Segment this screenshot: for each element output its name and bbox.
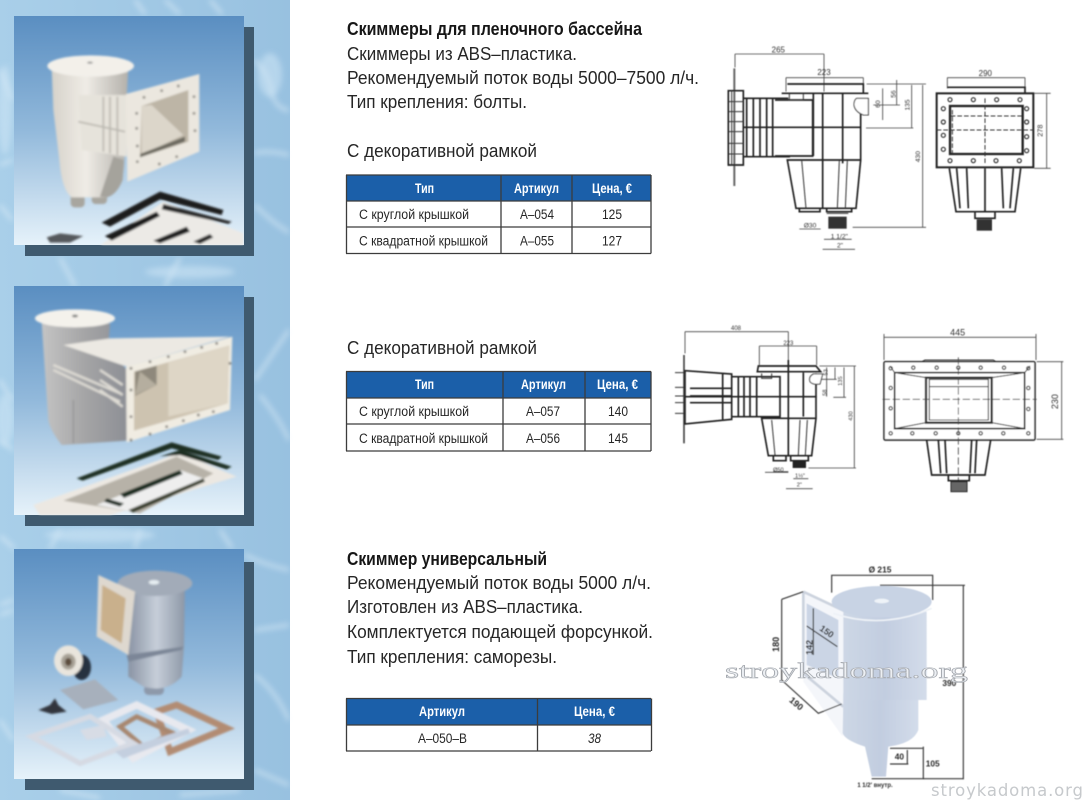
table 1: Тип xyxy=(415,181,434,196)
skimmer body xyxy=(803,586,932,777)
side view 2: 2" xyxy=(797,483,802,489)
front view 2: 230 xyxy=(1050,394,1060,409)
dimensions: 1 1/2' внутр. xyxy=(857,783,893,789)
technical drawing 3: universal skimmer xyxy=(771,565,965,789)
side view 2: 430 xyxy=(849,411,855,421)
table 2 xyxy=(346,371,651,451)
section 3 heading and description xyxy=(347,548,653,667)
table 2: Тип xyxy=(415,377,434,392)
dimensions: 40 xyxy=(895,751,904,761)
table 1: Цена, € xyxy=(592,181,632,196)
table 1: 125 xyxy=(602,207,622,222)
dimensions: 150 xyxy=(818,623,836,640)
side view 2: 408 xyxy=(731,326,742,332)
table 1: С квадратной крышкой xyxy=(359,234,488,248)
side view 1: 1 1/2" xyxy=(831,233,849,240)
side view 1: 56 xyxy=(891,90,898,98)
front view 1: 278 xyxy=(1036,125,1045,137)
section 1 heading and description xyxy=(347,18,699,112)
table 2: Артикул xyxy=(521,377,566,392)
table 3: Артикул xyxy=(419,704,465,719)
table 1: С круглой крышкой xyxy=(359,207,469,222)
dimensions: 190 xyxy=(787,695,805,712)
dimensions: 180 xyxy=(771,637,781,652)
dimensions: 142 xyxy=(805,640,815,655)
skimmer photo 3 xyxy=(32,571,227,763)
side view 2: 53 xyxy=(823,369,829,375)
side view 1: 430 xyxy=(915,151,922,162)
front view 1: 290 xyxy=(979,69,993,78)
dimensions xyxy=(771,565,965,789)
table 2: А–057 xyxy=(526,404,560,419)
table 3 xyxy=(346,698,652,751)
technical drawing 2 xyxy=(675,326,1063,492)
side view 2: 1½" xyxy=(795,473,805,480)
section 1 heading and description: Скиммеры для пленочного бассейна xyxy=(347,18,643,39)
water background strip xyxy=(0,0,290,800)
section 3 heading and description: Изготовлен из ABS–пластика. xyxy=(347,596,583,617)
section 3 heading and description: Тип крепления: саморезы. xyxy=(347,646,557,667)
table 3: 38 xyxy=(588,731,601,746)
side view 1: 265 xyxy=(772,45,786,54)
table 2: 140 xyxy=(608,404,628,419)
front view 2 xyxy=(883,327,1063,492)
table 1: А–055 xyxy=(520,234,554,248)
photo panel: skimmer with decorative frame 1 xyxy=(14,16,254,256)
table 1 xyxy=(346,174,651,254)
table 1: 127 xyxy=(602,234,622,248)
photo panel: universal skimmer xyxy=(14,549,254,790)
photo panel: skimmer with decorative frame 2 xyxy=(14,286,254,526)
side view 2: 223 xyxy=(783,341,794,347)
table 1: Артикул xyxy=(514,181,559,196)
side view 1: 223 xyxy=(817,68,831,77)
technical drawing 1 xyxy=(728,45,1051,249)
section 3 heading and description: Рекомендуемый поток воды 5000 л/ч. xyxy=(347,572,651,593)
section 1 heading and description: Тип крепления: болты. xyxy=(347,91,527,112)
side view 1: 135 xyxy=(904,99,911,111)
subheading 2: С декоративной рамкой xyxy=(347,337,537,358)
dimensions: Ø 215 xyxy=(869,565,892,575)
table 3: А–050–В xyxy=(418,731,467,746)
section 1 heading and description: Скиммеры из ABS–пластика. xyxy=(347,43,577,64)
table 3: Цена, € xyxy=(574,704,615,719)
side view 1: Ø30 xyxy=(804,222,817,229)
table 1: А–054 xyxy=(520,207,554,222)
table 2: 145 xyxy=(608,431,628,446)
section 3 heading and description: Скиммер универсальный xyxy=(347,548,547,569)
table 2: Цена, € xyxy=(597,377,638,392)
table 2: С квадратной крышкой xyxy=(359,431,488,446)
side view 2: Ø50 xyxy=(773,467,784,473)
watermark bottom right: stroykadoma.org xyxy=(931,781,1083,800)
watermark over drawing: stroykadoma.org xyxy=(725,658,968,683)
front view 1 xyxy=(937,69,1051,231)
skimmer photo 2 xyxy=(33,309,237,515)
side view 1: 60 xyxy=(875,100,882,108)
side view 2: 58 xyxy=(823,390,829,396)
section 1 heading and description: Рекомендуемый поток воды 5000–7500 л/ч. xyxy=(347,67,699,88)
table 2: А–056 xyxy=(526,431,560,446)
dimensions: 105 xyxy=(926,759,940,769)
table 2: С круглой крышкой xyxy=(359,404,469,419)
side view 1: 2" xyxy=(837,242,844,249)
side view 2: 135 xyxy=(838,376,844,386)
front view 2: 445 xyxy=(950,327,965,337)
side view 1 xyxy=(728,45,926,249)
side view 2 xyxy=(675,326,856,489)
skimmer photo 1 xyxy=(47,55,244,245)
dimensions: 390 xyxy=(942,678,957,688)
subheading 1: С декоративной рамкой xyxy=(347,140,537,161)
section 3 heading and description: Комплектуется подающей форсункой. xyxy=(347,621,653,642)
